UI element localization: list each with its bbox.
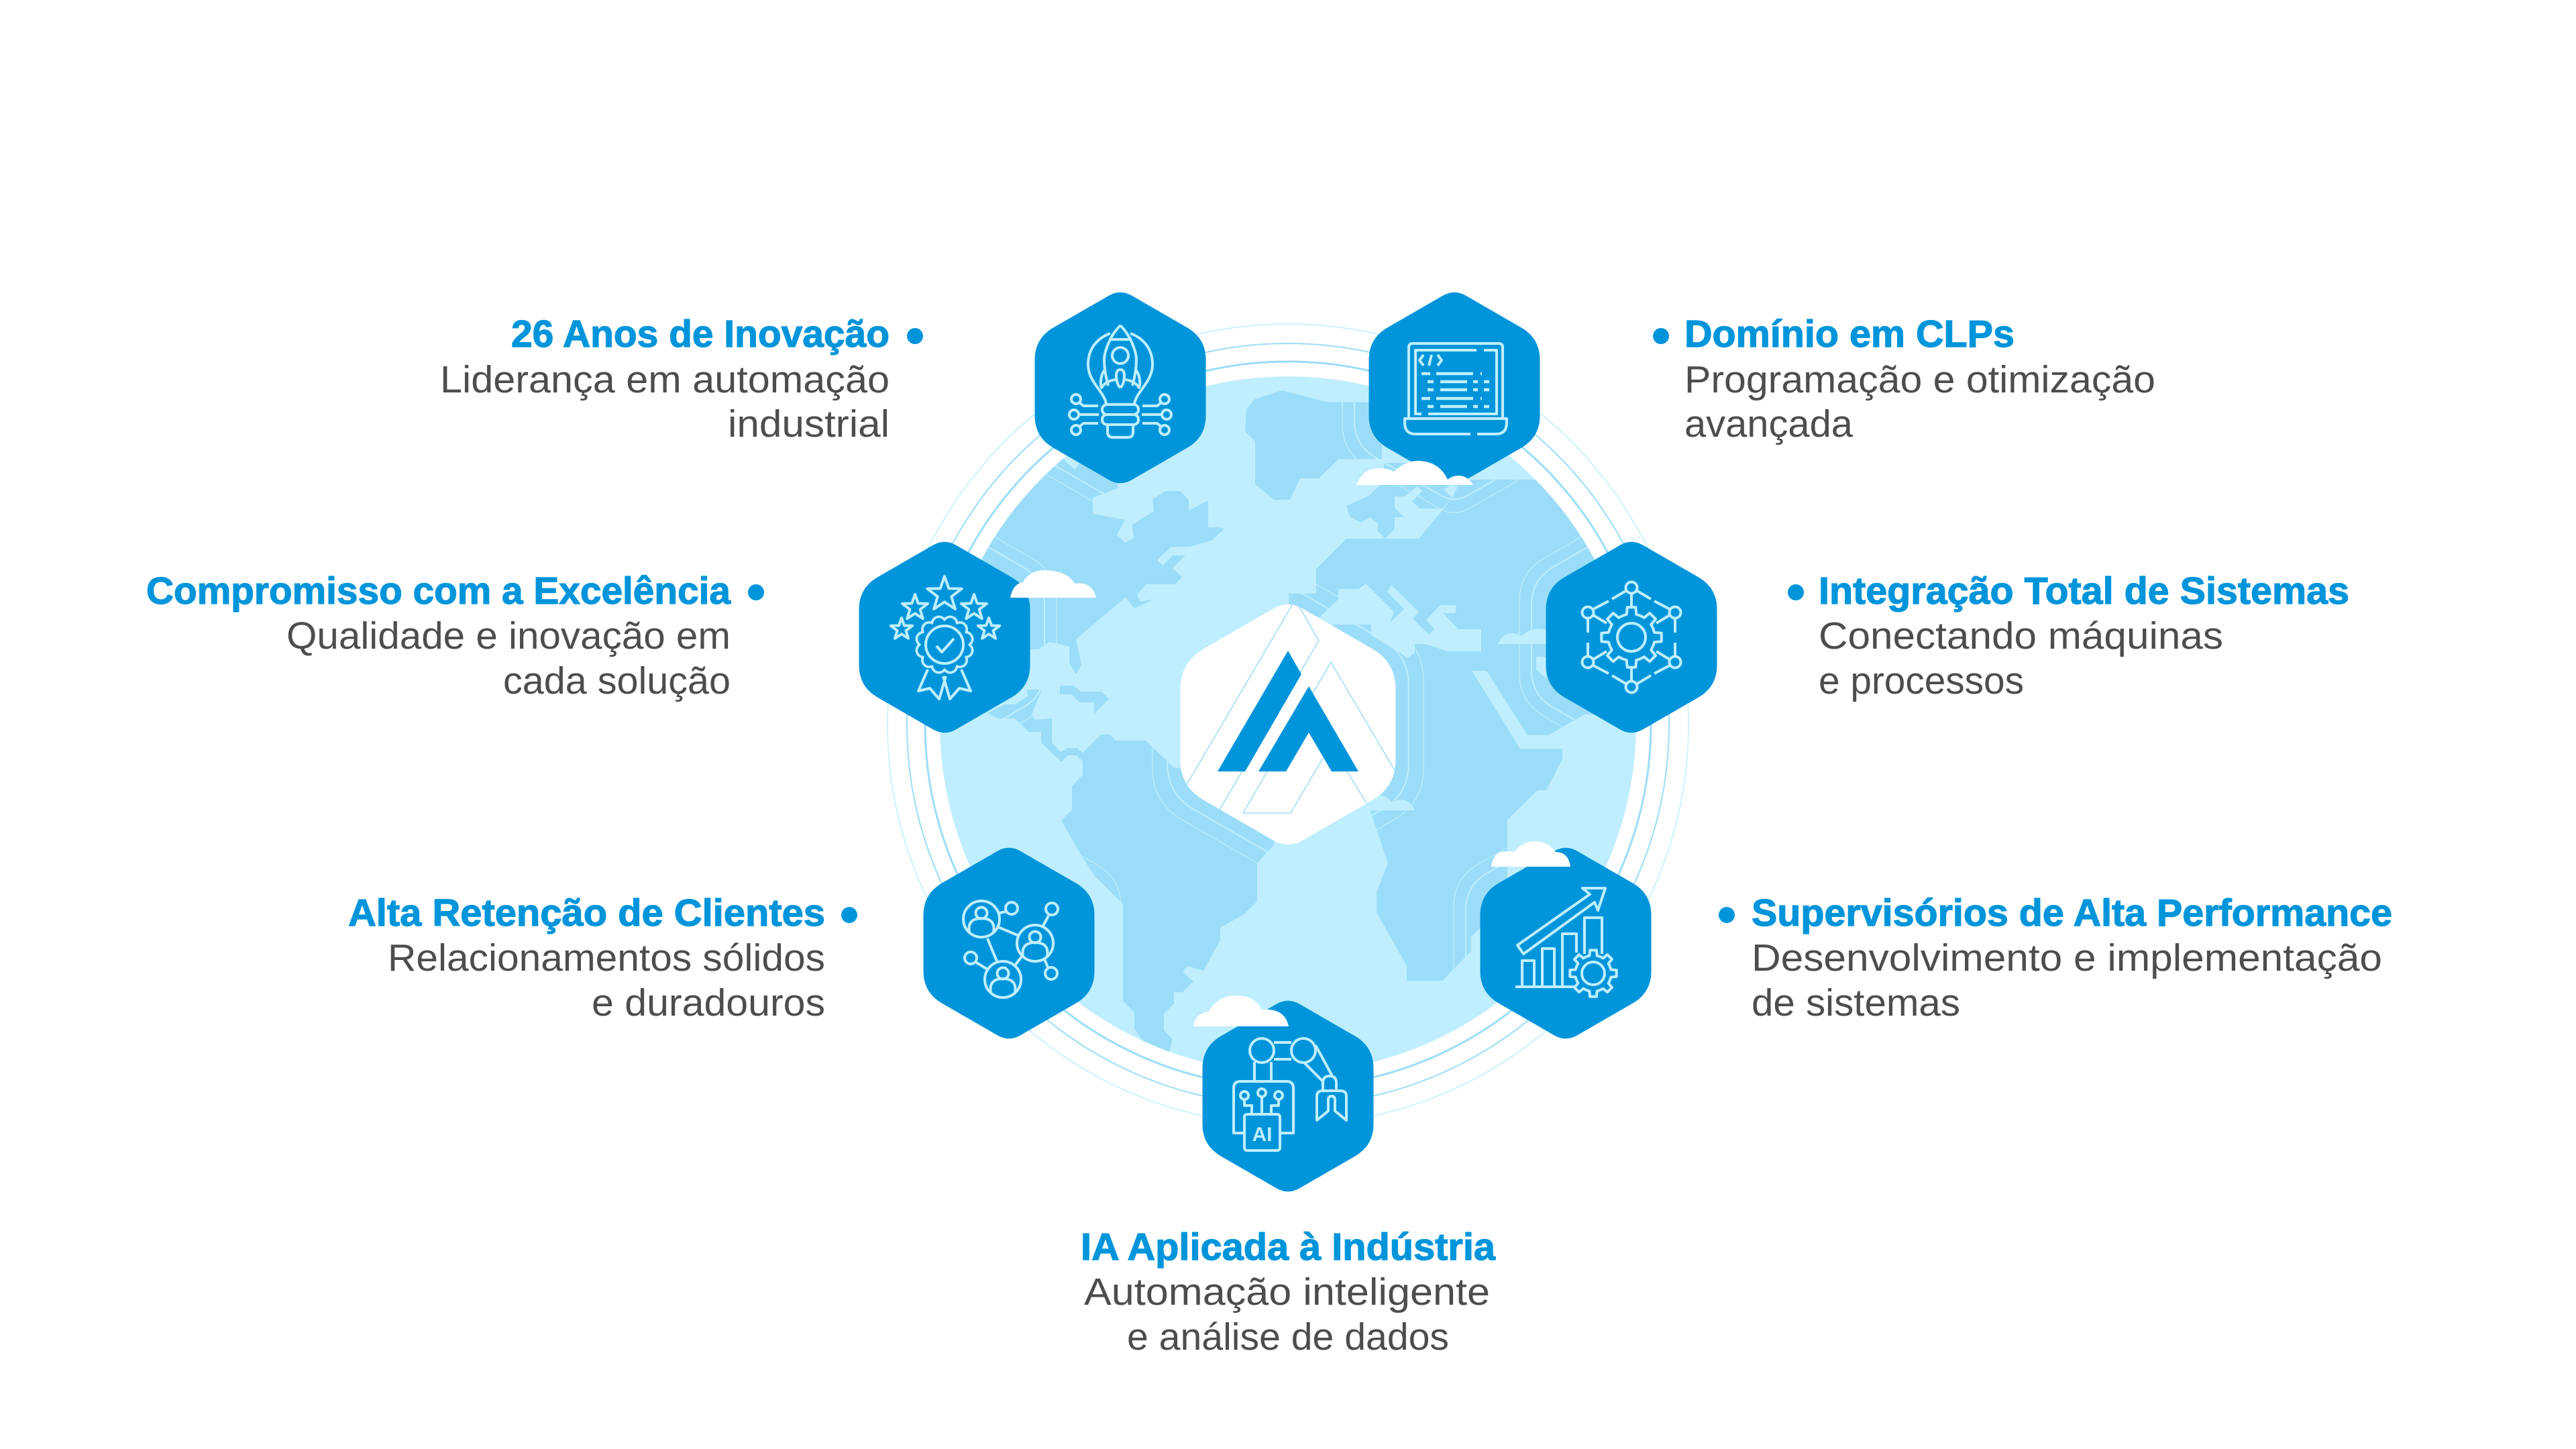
text block: 26 Anos de Inovação: Liderança em automação	[440, 358, 890, 401]
hexagon: CLPs, laptop code icon	[1368, 292, 1540, 483]
text block: Supervisórios de Alta Performance: Supervisórios de Alta Performance	[1752, 892, 2392, 934]
text block: IA Aplicada à Indústria: IA Aplicada à Indústria	[1081, 1226, 1496, 1269]
text block: IA Aplicada à Indústria	[1081, 1226, 1496, 1358]
hexagon: excelência, award icon	[859, 542, 1030, 733]
text block: Alta Retenção de Clientes: e duradouros	[592, 981, 825, 1024]
text block: IA Aplicada à Indústria: e análise de dados	[1127, 1316, 1449, 1358]
text block: Domínio em CLPs: Domínio em CLPs	[1684, 313, 2015, 356]
text block: 26 Anos de Inovação: industrial	[728, 402, 890, 445]
text block: Domínio em CLPs: Programação e otimização	[1684, 358, 2155, 401]
hexagon: integração, gear network icon	[1546, 542, 1717, 733]
hexagon: 26 anos, rocket light bulb icon	[1034, 292, 1206, 483]
world map globe	[940, 376, 1636, 1062]
hexagon: retenção, people network icon	[923, 848, 1095, 1038]
hexagon: IA aplicada, robot arm icon	[1202, 1001, 1374, 1191]
hexagon: supervisórios, growth chart gear icon	[1480, 848, 1652, 1038]
text block: Alta Retenção de Clientes	[348, 892, 857, 1024]
text block: Domínio em CLPs: avançada	[1684, 402, 1853, 445]
text block: Integração Total de Sistemas: Integração Total de Sistemas	[1819, 570, 2349, 612]
center hexagon with logo	[1180, 604, 1396, 845]
text block: 26 Anos de Inovação: 26 Anos de Inovação	[511, 313, 890, 356]
text block: Supervisórios de Alta Performance	[1719, 892, 2392, 1024]
text block: Supervisórios de Alta Performance: Desenvolvimento e implementação	[1752, 936, 2382, 979]
text block: Alta Retenção de Clientes: Relacionamentos sólidos	[388, 936, 825, 979]
text block: Integração Total de Sistemas	[1788, 570, 2349, 702]
globe orbit rings	[888, 324, 1688, 1125]
text block: Compromisso com a Excelência: Qualidade e inovação em	[286, 614, 731, 657]
text block: Compromisso com a Excelência: cada solução	[503, 659, 731, 702]
text block: 26 Anos de Inovação	[440, 313, 923, 445]
text block: IA Aplicada à Indústria: Automação inteligente	[1084, 1271, 1490, 1313]
text block: Compromisso com a Excelência: Compromisso com a Excelência	[146, 570, 731, 612]
text block: Compromisso com a Excelência	[146, 570, 764, 702]
text block: Integração Total de Sistemas: e processos	[1819, 659, 2024, 702]
text block: Supervisórios de Alta Performance: de sistemas	[1752, 981, 1960, 1024]
clouds	[1010, 461, 1570, 1026]
text block: Alta Retenção de Clientes: Alta Retenção de Clientes	[348, 892, 825, 934]
text block: Integração Total de Sistemas: Conectando máquinas	[1819, 614, 2223, 657]
text block: Domínio em CLPs	[1653, 313, 2155, 445]
AI chip label: AI	[1252, 1124, 1272, 1146]
